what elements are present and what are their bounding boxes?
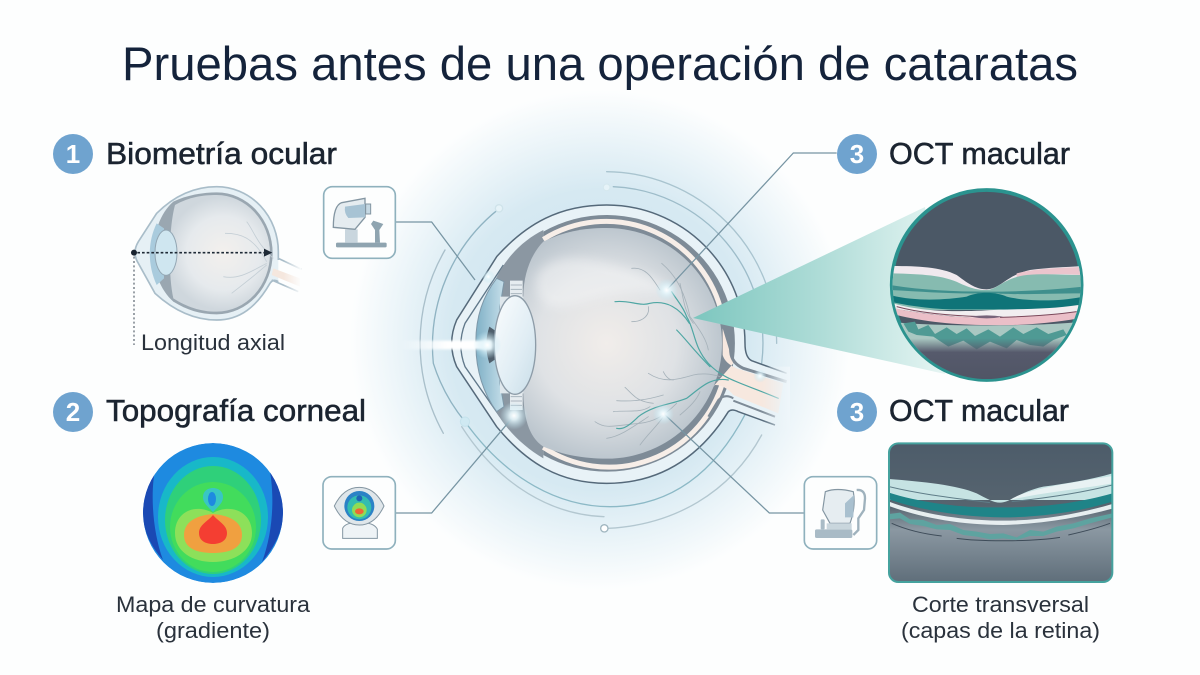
retinal vessels <box>595 263 778 445</box>
cornea second outline <box>461 265 503 417</box>
corneal topography map <box>143 443 283 583</box>
icon: biometer device <box>324 187 395 258</box>
caption: cross-section: Corte transversal <box>912 592 1089 617</box>
caption: curvature map: Mapa de curvatura <box>116 592 310 617</box>
cornea <box>476 278 504 412</box>
caption: axial length: Longitud axial <box>141 330 285 355</box>
section 2 heading: 2 <box>66 397 80 427</box>
leader lines <box>396 153 837 513</box>
glow points <box>473 270 767 430</box>
caption: curvature map <box>116 592 310 643</box>
eye interior <box>150 192 302 314</box>
OCT cross-section panel <box>889 443 1112 582</box>
macular OCT circular magnification <box>890 190 1090 385</box>
section 2 heading <box>53 392 366 432</box>
axial length arrow <box>131 249 272 345</box>
sclera outline <box>452 205 787 483</box>
section 3 heading: OCT top: OCT macular <box>889 137 1070 171</box>
caption: cross-section: (capas de la retina) <box>901 618 1100 643</box>
title: Pruebas antes de una operación de cataratas <box>122 37 1078 90</box>
section 3 heading: OCT top: 3 <box>850 139 864 169</box>
choroid ring <box>543 215 735 472</box>
section 3 heading: OCT bottom: OCT macular <box>889 394 1069 428</box>
magnification cone <box>693 207 945 374</box>
section 2 heading: Topografía corneal <box>106 394 366 428</box>
section 1 heading <box>53 134 337 174</box>
nerve fade <box>762 367 790 430</box>
section 1 heading: Biometría ocular <box>106 137 337 171</box>
lens <box>494 296 536 394</box>
background glow behind eye <box>350 90 850 590</box>
retina cream band <box>543 221 723 467</box>
light beam <box>400 341 492 349</box>
caption: curvature map: (gradiente) <box>156 618 270 643</box>
optic nerve <box>712 328 783 413</box>
section 3 heading: OCT bottom <box>837 392 1069 432</box>
icon: OCT device <box>804 477 877 549</box>
vitreous body <box>523 228 722 459</box>
central eye diagram <box>396 153 837 532</box>
section 1 heading: 1 <box>66 139 80 169</box>
section 3 heading: OCT top <box>837 134 1070 174</box>
small eye biometry diagram <box>131 187 302 345</box>
anterior chamber <box>500 297 525 393</box>
section 3 heading: OCT bottom: 3 <box>850 397 864 427</box>
caption: cross-section <box>901 592 1100 643</box>
iris and ciliary body <box>496 230 543 458</box>
orbit rings <box>420 172 777 532</box>
icon: topography patient <box>323 477 395 549</box>
